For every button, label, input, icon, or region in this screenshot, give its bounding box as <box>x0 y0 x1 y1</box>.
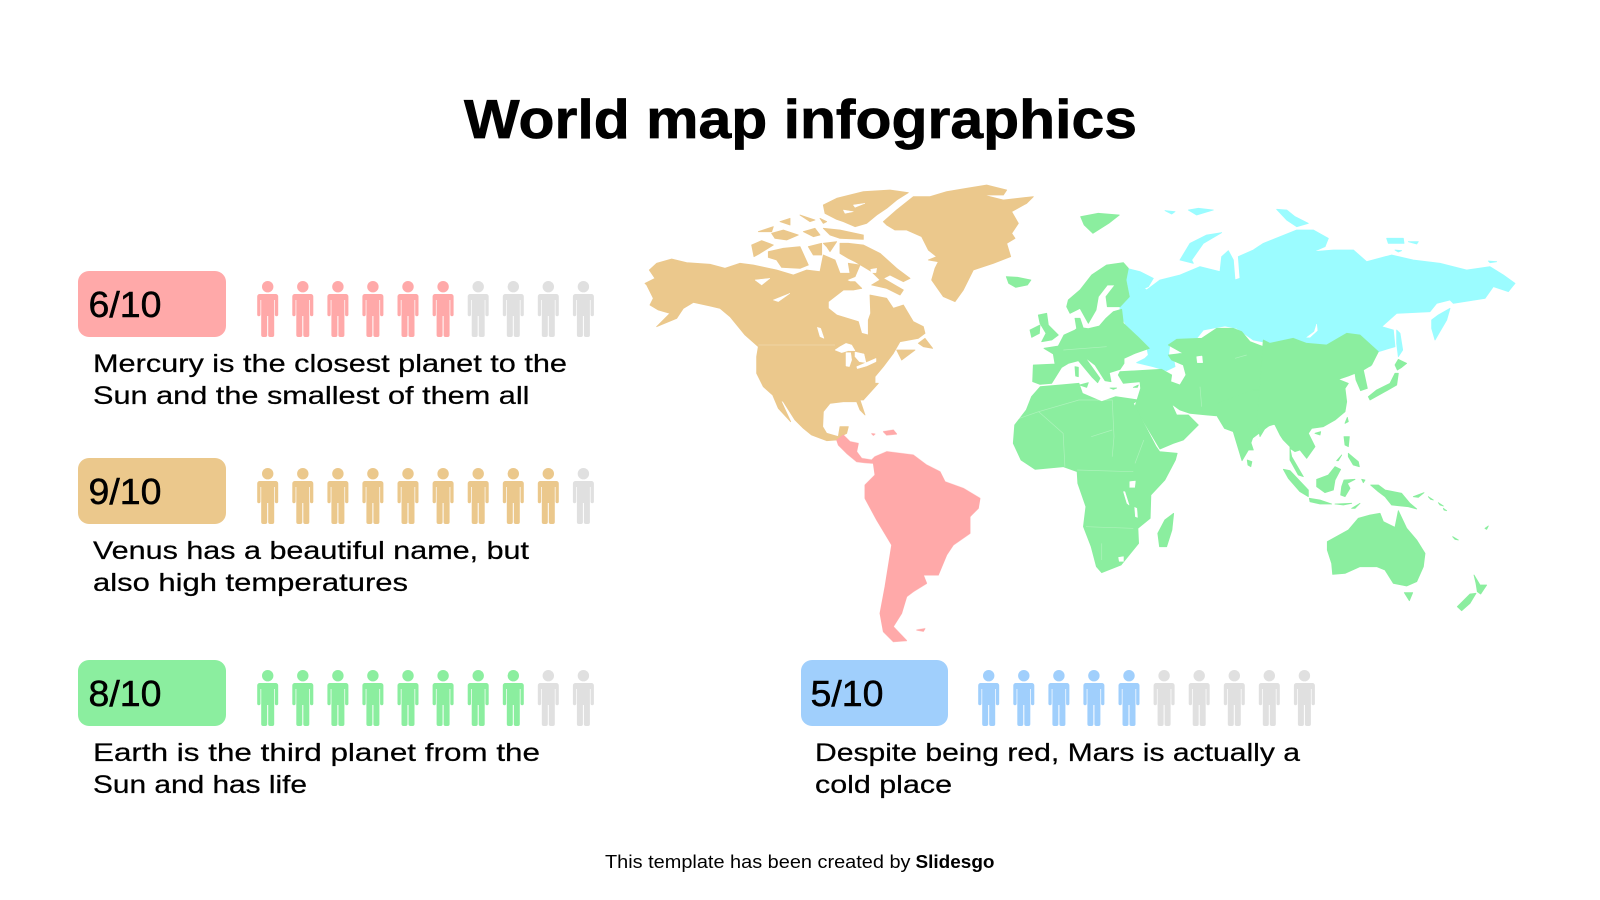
map region: Russia <box>1120 208 1515 371</box>
map region: North America and Greenland <box>645 185 1033 441</box>
Africa <box>1013 383 1177 573</box>
pictogram: 5 of 10 people <box>978 670 1315 726</box>
badge: 9/10 <box>78 458 226 524</box>
map region: Europe, Africa, Asia and Oceania <box>1006 213 1488 611</box>
New Zealand <box>1474 575 1487 594</box>
description: Earth: Sun and has life <box>93 771 307 799</box>
badge: 8/10: 8/10 <box>88 673 162 714</box>
pictogram: 6 of 10 people <box>257 281 594 337</box>
description: Mars <box>815 739 1300 799</box>
badge: 9/10: 9/10 <box>88 471 162 512</box>
description: Venus <box>93 537 529 597</box>
description: Mercury <box>93 350 567 410</box>
description: Venus: Venus has a beautiful name, but <box>93 537 529 565</box>
footer credit: Slidesgo <box>916 851 994 872</box>
pictogram: 9 of 10 people <box>257 468 594 524</box>
description: Venus: also high temperatures <box>93 569 408 597</box>
description: Mercury: Sun and the smallest of them all <box>93 382 530 410</box>
badge: 5/10 <box>801 660 948 726</box>
badge: 8/10 <box>78 660 226 726</box>
map region: South and Central America <box>837 430 980 642</box>
panel: Earth <box>78 660 594 799</box>
panel: Venus <box>78 458 594 597</box>
panel: Mercury <box>78 271 594 410</box>
lakes and inlets <box>755 203 877 369</box>
badge: 6/10 <box>78 271 226 337</box>
title: World map infographics <box>464 88 1137 150</box>
footer credit: This template has been created by <box>605 851 911 872</box>
description: Mars: Despite being red, Mars is actually a <box>815 739 1300 767</box>
description: Earth <box>93 739 540 799</box>
Australia <box>1327 511 1425 586</box>
Greenland <box>883 185 1033 302</box>
description: Mercury: Mercury is the closest planet to the <box>93 350 567 378</box>
panel: Mars <box>801 660 1315 799</box>
world map <box>645 185 1515 642</box>
description: Mars: cold place <box>815 771 952 799</box>
badge: 5/10: 5/10 <box>810 673 884 714</box>
badge: 6/10: 6/10 <box>88 284 162 325</box>
pictogram: 8 of 10 people <box>257 670 594 726</box>
description: Earth: Earth is the third planet from the <box>93 739 540 767</box>
